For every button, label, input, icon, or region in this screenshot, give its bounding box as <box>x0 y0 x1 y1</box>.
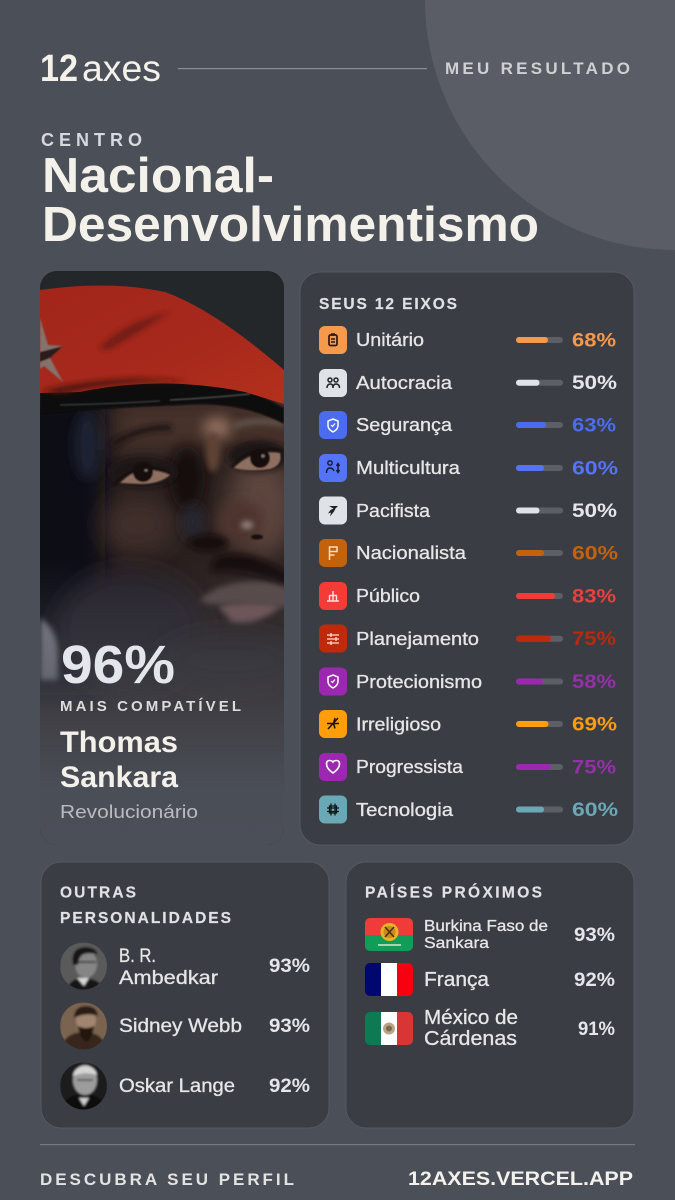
axis: Protecionismo: Protecionismo <box>356 672 482 692</box>
person: Sidney Webb: Sidney Webb <box>119 1016 242 1037</box>
axis: Unitário: 68% <box>572 330 616 352</box>
beret <box>40 285 284 404</box>
mouth <box>200 581 290 608</box>
person: Oskar Lange: Oskar Lange <box>119 1076 235 1097</box>
logo <box>40 48 161 90</box>
country: França <box>365 963 615 996</box>
axis: Autocracia: Autocracia <box>356 373 453 393</box>
website: 12AXES.VERCEL.APP <box>408 1169 633 1190</box>
axis: Planejamento: 75% <box>572 628 616 650</box>
person: Ambedkar: B. R. <box>119 946 156 967</box>
country: México: 91% <box>578 1018 615 1040</box>
person: Sidney Webb: 93% <box>269 1015 310 1037</box>
country: Burkina Faso: Sankara <box>424 935 489 952</box>
axis: Multicultura: Multicultura <box>356 458 461 478</box>
axis: Nacionalista: Nacionalista <box>356 543 467 563</box>
axis: Público <box>319 582 616 610</box>
axis: Protecionismo <box>319 668 616 696</box>
call to action: DESCUBRA SEU PERFIL <box>40 1170 294 1189</box>
axis: Tecnologia <box>319 796 618 824</box>
axis: Tecnologia: Tecnologia <box>356 800 454 820</box>
footer <box>40 1169 633 1190</box>
panel: other personalities <box>41 862 329 1128</box>
countries heading: PAÍSES PRÓXIMOS <box>365 884 542 902</box>
axis: Pacifista <box>319 496 617 524</box>
axis: Unitário: Unitário <box>356 330 424 350</box>
nose <box>216 500 264 544</box>
country: México <box>365 1008 614 1046</box>
axes heading: SEUS 12 EIXOS <box>319 296 457 313</box>
portrait illustration <box>40 271 284 845</box>
country: México: Cárdenas <box>424 1028 517 1050</box>
person: Oskar Lange: 92% <box>269 1075 310 1097</box>
country: Burkina Faso: Burkina Faso de <box>424 918 548 935</box>
axis: Multicultura: 60% <box>572 458 618 480</box>
axis: Progressista <box>319 753 616 781</box>
axis: Autocracia <box>319 369 617 397</box>
dark side of the face <box>40 408 115 696</box>
decorative corner circle <box>425 0 675 250</box>
axis: Pacifista: Pacifista <box>356 501 431 521</box>
country: França: França <box>424 969 490 991</box>
axis: Irreligioso: 69% <box>572 714 617 736</box>
axis: Segurança: 63% <box>572 414 616 436</box>
beret band <box>40 381 284 424</box>
ideology name <box>42 149 539 252</box>
country: México: México de <box>424 1007 518 1029</box>
axis: Unitário <box>319 326 616 354</box>
collar highlight <box>40 618 58 680</box>
lower face <box>56 568 194 674</box>
axis: Progressista: Progressista <box>356 757 464 777</box>
panel: nearby countries <box>346 862 634 1128</box>
star badge <box>40 318 63 382</box>
country: França: 92% <box>574 969 615 991</box>
ideology name: Nacional- <box>42 149 274 203</box>
eye sockets <box>109 457 177 487</box>
personalities heading <box>60 884 231 927</box>
axis: Segurança: Segurança <box>356 415 453 435</box>
header <box>40 48 630 90</box>
panel: axes <box>300 272 634 845</box>
axis: Público: 83% <box>572 586 616 608</box>
logo: 12 <box>40 48 78 90</box>
axis: Público: Público <box>356 586 420 606</box>
axis: Irreligioso <box>319 710 617 738</box>
logo: axes <box>82 48 161 89</box>
person: Ambedkar: Ambedkar <box>119 968 219 989</box>
fade to background <box>40 560 284 845</box>
match name: Sankara <box>60 761 178 794</box>
brows <box>112 428 172 445</box>
match role: Revolucionário <box>60 801 198 822</box>
country: Burkina Faso: 93% <box>574 924 615 946</box>
match name <box>60 726 178 794</box>
axis: Protecionismo: 58% <box>572 671 616 693</box>
result label: MEU RESULTADO <box>445 59 630 78</box>
axis: Nacionalista <box>319 539 618 567</box>
category: CENTRO <box>41 130 142 150</box>
axis: Autocracia: 50% <box>572 372 617 394</box>
axis: Planejamento <box>319 624 616 652</box>
title block <box>41 130 539 252</box>
axis: Progressista: 75% <box>572 756 616 778</box>
axis: Pacifista: 50% <box>572 500 617 522</box>
match percentage: 96% <box>61 635 175 695</box>
country: Burkina Faso <box>365 918 615 952</box>
match name: Thomas <box>60 726 178 759</box>
ideology name: Desenvolvimentismo <box>42 198 539 252</box>
person: Oskar Lange <box>60 1062 310 1112</box>
personalities heading: PERSONALIDADES <box>60 910 231 927</box>
axis: Irreligioso: Irreligioso <box>356 714 441 734</box>
person: Ambedkar <box>60 942 310 992</box>
match label: MAIS COMPATÍVEL <box>60 698 241 715</box>
axis: Planejamento: Planejamento <box>356 629 479 649</box>
person: Ambedkar: 93% <box>269 955 310 977</box>
axis: Tecnologia: 60% <box>572 799 618 821</box>
forehead and cheeks <box>115 400 305 450</box>
person: Sidney Webb <box>60 1002 310 1052</box>
personalities heading: OUTRAS <box>60 884 136 902</box>
eyes <box>114 448 283 485</box>
axis: Multicultura <box>319 454 618 482</box>
axis: Nacionalista: 60% <box>572 542 618 564</box>
axis: Segurança <box>319 411 616 439</box>
moustache <box>210 554 290 588</box>
panel: top match portrait <box>40 271 284 845</box>
